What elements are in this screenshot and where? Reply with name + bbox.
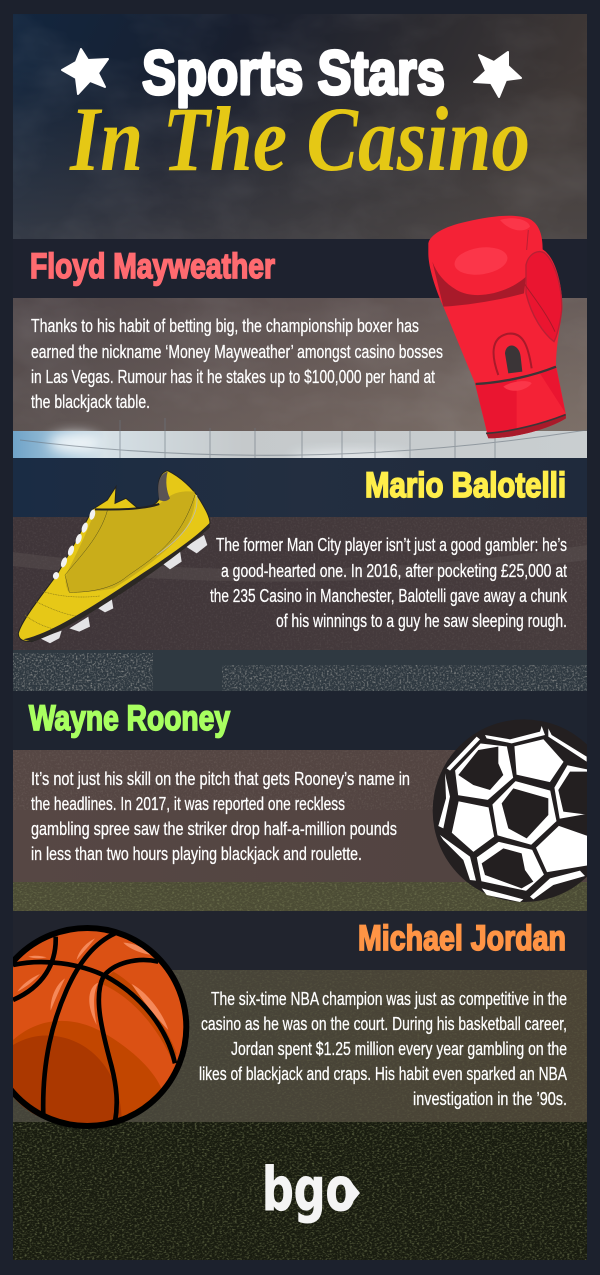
text block: the headlines. In 2017, it was reported one reckless (31, 794, 345, 814)
heading: Wayne Rooney (29, 699, 230, 738)
text block: the blackjack table. (31, 392, 150, 412)
text block (199, 989, 567, 1109)
icon: right star (474, 52, 521, 97)
text block (31, 316, 443, 412)
icon: basketball (0, 927, 187, 1127)
text block: investigation in the ’90s. (413, 1089, 567, 1109)
text block: Thanks to his habit of betting big, the championship boxer has (31, 316, 419, 336)
icon: football boot (18, 471, 210, 643)
panel: Mario Balotelli (210, 466, 568, 631)
text block: It’s not just his skill on the pitch that gets Rooney’s name in (31, 769, 410, 789)
heading: Mario Balotelli (365, 466, 566, 505)
icon: football (433, 719, 600, 902)
text block (31, 769, 410, 864)
icon: left star (62, 49, 108, 94)
text block: in less than two hours playing blackjack and roulette. (31, 844, 362, 864)
text block: earned the nickname ‘Money Mayweather’ amongst casino bosses (31, 342, 443, 362)
text block (210, 535, 568, 631)
panel: Wayne Rooney (29, 699, 410, 864)
panel: Floyd Mayweather (30, 247, 443, 412)
icon: boxing glove (428, 216, 566, 438)
text block: in Las Vegas. Rumour has it he stakes up to $100,000 per hand at (31, 367, 435, 387)
title (62, 39, 521, 108)
title line: Sports Stars: Sports Stars (142, 39, 445, 108)
heading: Floyd Mayweather (30, 247, 275, 286)
logo: bgo: bgo (262, 1155, 356, 1225)
text block: gambling spree saw the striker drop half-a-million pounds (31, 819, 397, 839)
panel: Michael Jordan (199, 919, 567, 1109)
